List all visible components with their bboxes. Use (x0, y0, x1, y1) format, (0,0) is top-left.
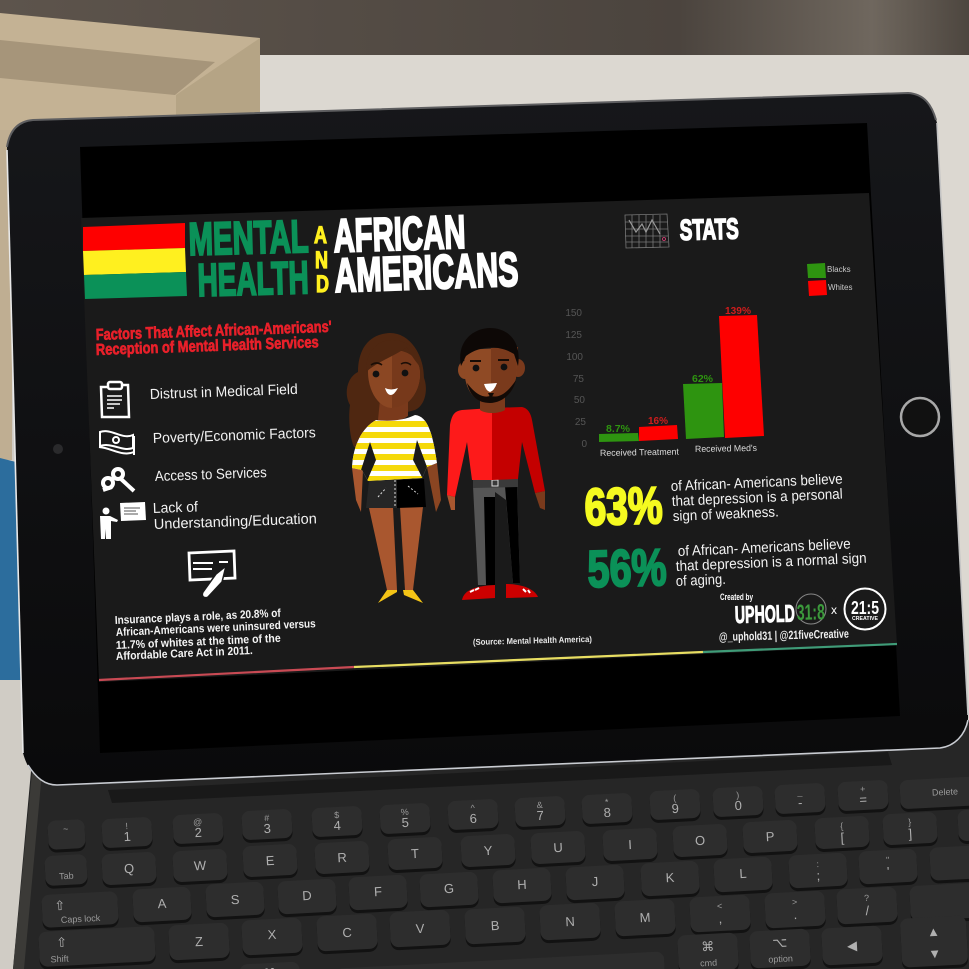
eyes (473, 365, 479, 371)
icon: front camera (53, 444, 63, 454)
credits: 21:5 (851, 598, 879, 618)
icon: clipboard (101, 382, 129, 417)
keyboard: S (230, 892, 240, 907)
stat: 56 percent: 56% (587, 539, 667, 599)
keyboard: 6 (469, 811, 477, 826)
y axis: 75 (573, 374, 584, 385)
credits: Created by (720, 592, 753, 602)
keyboard: Caps lock (61, 913, 101, 925)
title: MENTAL (188, 210, 309, 265)
keyboard: 3 (263, 821, 271, 836)
keyboard: L (739, 866, 747, 881)
text: insurance note: Affordable Care Act in 2011. (116, 645, 253, 663)
keyboard: ◀ (847, 938, 857, 953)
heading: factors: Factors That Affect African-Americans' (96, 319, 332, 344)
keyboard: P (765, 829, 775, 844)
keyboard: 7 (536, 808, 544, 823)
keyboard: 4 (333, 818, 341, 833)
keyboard: E (265, 853, 275, 868)
keyboard: option (768, 953, 793, 965)
value labels: 139% (725, 305, 752, 317)
category labels: Received Treatment (600, 447, 680, 458)
keyboard: ⌥ (772, 935, 788, 950)
text: insurance note: Insurance plays a role, as 20.8% of (115, 608, 281, 627)
text: insurance note (115, 608, 316, 663)
keyboard: " (886, 855, 890, 865)
stat: 63 percent: of African- Americans believe (670, 472, 843, 495)
shirt (447, 408, 492, 497)
keyboard: 2 (194, 825, 202, 840)
illustration: woman (345, 333, 445, 603)
keyboard: M (639, 910, 651, 925)
keyboard: = (859, 792, 867, 807)
keyboard: G (444, 881, 454, 896)
text: access: Access to Services (155, 465, 267, 485)
hair (460, 328, 519, 366)
keyboard: ~ (63, 824, 69, 834)
value labels (606, 305, 752, 435)
stat: 56 percent: of African- Americans believe (677, 536, 851, 560)
belt (473, 478, 518, 488)
keyboard: + (860, 784, 866, 794)
legend: Whites (828, 283, 852, 292)
text: poverty: Poverty/Economic Factors (153, 425, 316, 447)
text: lack of understanding: Lack of (153, 499, 199, 517)
credits (719, 588, 886, 644)
title: AFRICAN (333, 205, 466, 262)
text: insurance note: 11.7% of whites at the time of the (116, 633, 281, 652)
title: N (315, 247, 328, 274)
stat: 63 percent: 63% (584, 477, 663, 537)
y axis: 125 (565, 330, 582, 341)
keyboard: - (798, 795, 803, 810)
keyboard: H (517, 877, 527, 892)
infographic panel (81, 193, 897, 682)
icon: presenter (100, 502, 146, 539)
stat: 63 percent: that depression is a personal (671, 487, 843, 510)
credits: x (831, 603, 837, 617)
keyboard: B (490, 918, 500, 933)
keyboard: C (342, 925, 352, 940)
keyboard: ( (673, 793, 676, 803)
credits: CREATIVE (852, 616, 879, 622)
category labels: Received Med's (695, 443, 758, 454)
keyboard: . (793, 907, 797, 922)
keyboard: ' (887, 864, 890, 879)
text: lack of understanding (153, 499, 317, 533)
keyboard: Delete (932, 786, 958, 798)
keyboard: R (337, 850, 347, 865)
tablet edge highlights (7, 93, 968, 785)
stats icon: line graph (625, 214, 669, 248)
smile (484, 383, 497, 392)
keyboard: < (717, 901, 723, 911)
keyboard: ⇧ (56, 935, 68, 950)
value labels: 16% (648, 415, 669, 427)
keyboard: { (840, 821, 843, 831)
keyboard: ⇧ (54, 898, 66, 913)
text: distrust: Distrust in Medical Field (150, 382, 298, 403)
y axis: 150 (565, 308, 582, 319)
keyboard: % (400, 807, 409, 817)
keyboard: U (553, 840, 563, 855)
icon: home button (901, 398, 939, 436)
keyboard (13, 720, 969, 969)
face (464, 347, 518, 403)
value labels: 8.7% (606, 423, 631, 435)
shoes (378, 590, 397, 603)
arms (352, 468, 363, 512)
title: A (314, 222, 327, 249)
stat: 56 percent (587, 536, 867, 599)
source: (Source: Mental Health America) (473, 634, 592, 647)
y axis: 100 (566, 352, 583, 363)
legs (369, 507, 397, 590)
skirt (366, 480, 397, 508)
keyboard: Z (195, 934, 203, 949)
shoes (462, 585, 495, 600)
stat: 56 percent: of aging. (675, 572, 726, 590)
keyboard: J (591, 874, 599, 889)
keyboard: ? (864, 893, 869, 903)
keyboard: N (565, 914, 575, 929)
keyboard: T (411, 846, 419, 861)
keyboard: F (374, 884, 382, 899)
screen (80, 123, 900, 753)
keyboard: / (865, 903, 870, 918)
bars (599, 433, 639, 442)
stat: 63 percent: sign of weakness. (672, 504, 779, 525)
keyboard: ] (908, 826, 912, 841)
credits: 31:8 (796, 599, 825, 625)
keyboard: , (718, 911, 722, 926)
keyboard: * (605, 797, 609, 807)
keyboard: ; (816, 868, 820, 883)
icon: signing a check (189, 551, 235, 598)
keyboard: > (792, 897, 798, 907)
text: insurance note: African-Americans were uninsured versus (116, 618, 316, 639)
keyboard: cmd (700, 958, 717, 968)
heading: stats: STATS (679, 213, 739, 247)
title: D (316, 271, 329, 298)
title (188, 205, 519, 306)
keyboard: ▲ (927, 924, 940, 939)
legend (807, 263, 852, 296)
keyboard: Shift (50, 953, 69, 964)
keyboard: $ (334, 810, 339, 820)
y axis: 50 (574, 395, 585, 406)
keyboard: [ (840, 830, 845, 845)
face (368, 350, 420, 408)
keyboard: 0 (734, 798, 742, 813)
keyboard: ⌘ (701, 939, 715, 954)
hands (447, 495, 455, 510)
keyboard: } (908, 817, 911, 827)
bar chart (565, 305, 764, 458)
keyboard: ! (125, 821, 128, 831)
keyboard: 8 (603, 805, 611, 820)
keyboard: ^ (470, 803, 476, 813)
credits: UPHOLD (734, 600, 795, 629)
keyboard: I (628, 837, 632, 852)
stat: 56 percent: that depression is a normal sign (675, 551, 867, 575)
category labels (600, 443, 758, 458)
value labels: 62% (692, 373, 714, 385)
keyboard: K (665, 870, 675, 885)
heading: factors: Reception of Mental Health Services (96, 334, 319, 359)
y axis (565, 308, 587, 450)
flag (83, 223, 187, 299)
illustration: man (447, 328, 545, 600)
hair back (347, 333, 426, 447)
heading: factors (96, 319, 332, 359)
keyboard: X (267, 927, 277, 942)
ears (458, 361, 472, 379)
keyboard: ) (736, 790, 739, 800)
shirt (352, 415, 437, 481)
keyboard: Tab (59, 871, 74, 881)
neck (480, 392, 505, 413)
keyboard: @ (193, 817, 203, 827)
keyboard: # (264, 813, 269, 823)
icon: keys (103, 469, 134, 491)
keyboard: 5 (401, 815, 409, 830)
keyboard: ▼ (928, 946, 941, 961)
title: HEALTH (197, 251, 309, 306)
y axis: 25 (575, 417, 586, 428)
beard (467, 380, 516, 403)
title: AMERICANS (334, 244, 519, 303)
keyboard: 1 (123, 829, 131, 844)
y axis: 0 (581, 439, 587, 450)
keyboard: V (415, 921, 425, 936)
keyboard: _ (796, 787, 803, 797)
stat: 63 percent (584, 472, 843, 537)
keyboard: O (695, 833, 705, 848)
legend: Blacks (827, 265, 851, 274)
credits: @_uphold31 | @21fiveCreative (719, 627, 849, 644)
keyboard: : (816, 859, 819, 869)
keyboard: Y (483, 843, 493, 858)
keyboard: 9 (671, 801, 679, 816)
tablet body (7, 93, 968, 785)
factor list (99, 382, 317, 539)
footer colour rule (99, 644, 897, 680)
keyboard: W (194, 858, 207, 873)
neck (378, 400, 408, 422)
keyboard: D (302, 888, 312, 903)
text: lack of understanding: Understanding/Education (154, 511, 317, 533)
keyboard: Q (124, 861, 134, 876)
icon: money (99, 431, 134, 455)
keyboard: & (536, 800, 543, 810)
trousers (473, 484, 520, 585)
keyboard: A (157, 896, 167, 911)
